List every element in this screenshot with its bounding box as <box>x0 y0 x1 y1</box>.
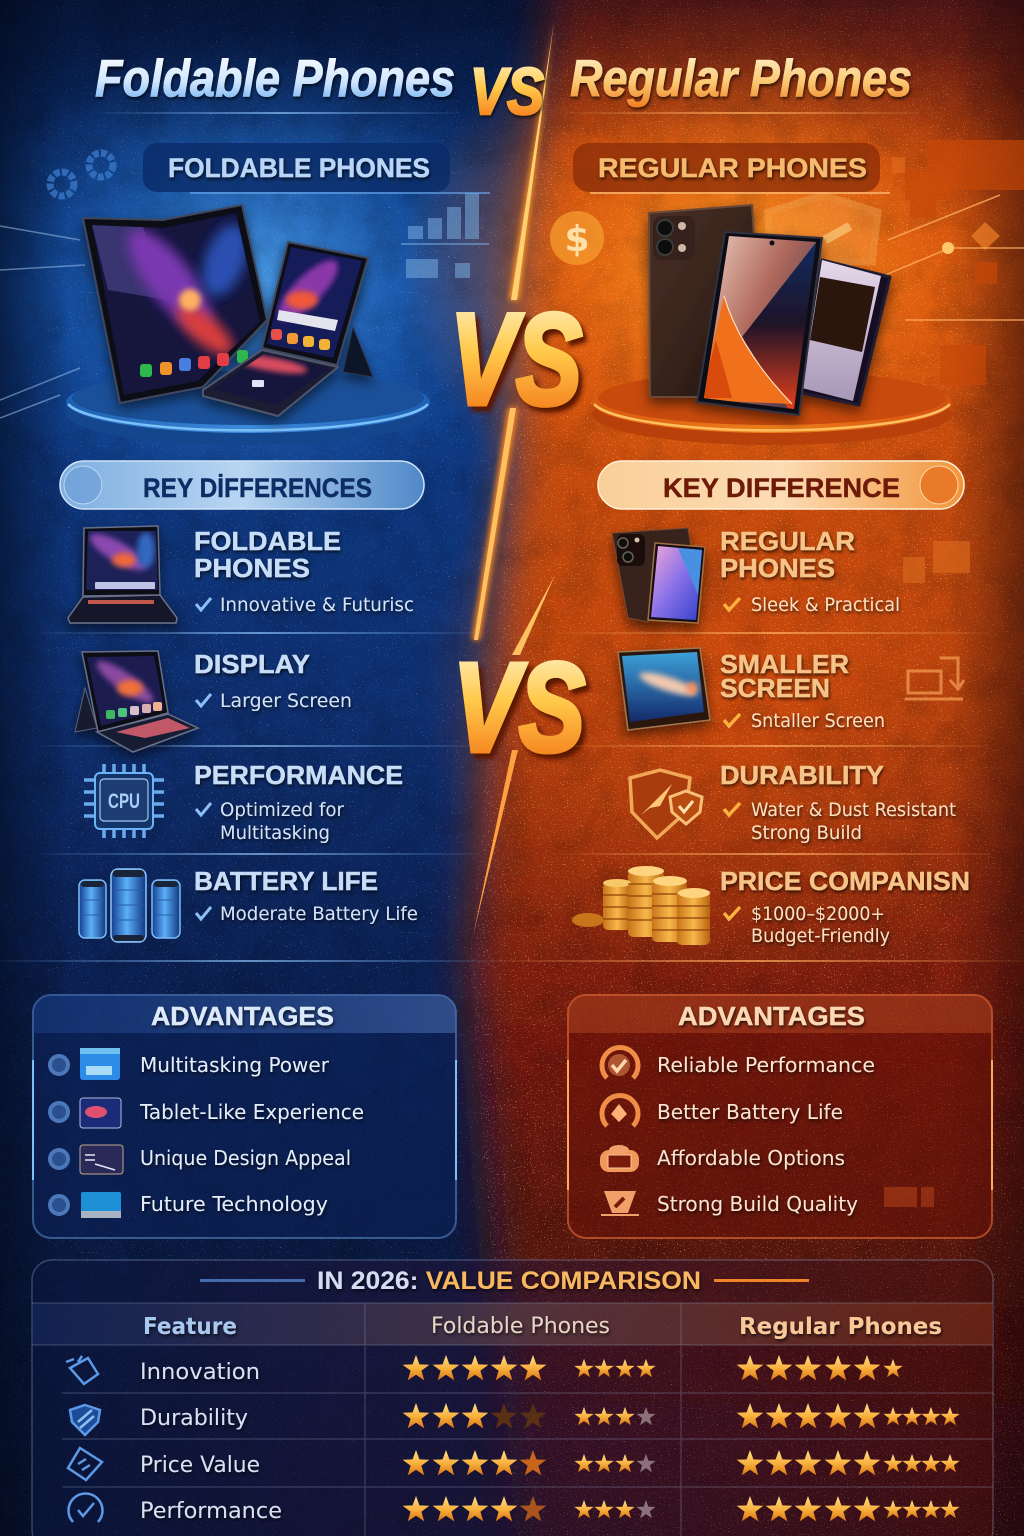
icon: coin stacks <box>572 866 710 945</box>
stars: price value foldable <box>403 1450 656 1475</box>
label: BATTERY LIFE <box>194 866 378 896</box>
heading rules <box>200 1279 809 1282</box>
left row: foldable phones <box>68 526 414 623</box>
platform: left <box>66 371 430 445</box>
title: foldable phones: Foldable Phones <box>95 50 455 108</box>
value: Strong Build <box>751 822 862 844</box>
icon: performance <box>68 1493 102 1522</box>
icon: durability <box>70 1405 100 1435</box>
section pill: regular phones: REGULAR PHONES <box>598 153 867 183</box>
decor screens <box>905 658 964 699</box>
item: affordable options: Affordable Options <box>657 1146 845 1170</box>
label: durability: Durability <box>140 1406 248 1431</box>
item: unique design appeal <box>50 1145 351 1174</box>
vs badge: upper: VS <box>450 286 582 432</box>
panel: value comparison table <box>32 1260 993 1536</box>
stars: performance regular <box>737 1496 960 1521</box>
icon: small foldable laptop-like phone <box>68 526 177 623</box>
value: Sntaller Screen <box>751 710 885 732</box>
check <box>196 803 211 815</box>
label: PRICE COMPANISN <box>720 866 970 896</box>
title: vs: VS <box>470 54 544 128</box>
value: Water & Dust Resistant <box>751 799 956 821</box>
stars: innovation foldable <box>403 1355 656 1380</box>
key differences pill: right <box>598 461 964 509</box>
icon: innovation <box>66 1356 98 1384</box>
label: PHONES <box>720 553 835 583</box>
column header: foldable phones: Foldable Phones <box>431 1314 610 1339</box>
label: DURABILITY <box>720 760 884 790</box>
foldable phones illustration <box>80 200 373 416</box>
check <box>196 694 211 706</box>
heading: ADVANTAGES <box>151 1001 334 1031</box>
decor: right coin, shield and blocks <box>550 140 1024 385</box>
lightning divider <box>472 22 555 936</box>
label: DISPLAY <box>194 649 310 679</box>
panel: advantages left <box>33 995 456 1238</box>
label: SMALLER <box>720 649 849 679</box>
stars: durability foldable <box>403 1403 656 1428</box>
label: SCREEN <box>720 673 830 703</box>
icon: shield with check <box>630 770 702 838</box>
key differences pill: left <box>60 461 424 509</box>
icon: open foldable on stand <box>75 650 198 752</box>
label: innovation: Innovation <box>140 1360 260 1385</box>
value: $1000–$2000+ <box>751 903 885 925</box>
item: unique design appeal: Unique Design Appeal <box>140 1146 351 1170</box>
stars: durability regular <box>737 1403 960 1428</box>
value: Sleek & Practical <box>751 594 900 616</box>
value: Budget-Friendly <box>751 925 890 947</box>
title underlines <box>100 112 920 114</box>
icon: two phones <box>612 528 705 623</box>
label: FOLDABLE <box>194 526 341 556</box>
item: multitasking power <box>50 1048 330 1080</box>
item: strong build quality: Strong Build Quality <box>657 1192 858 1216</box>
item: multitasking power: Multitasking Power <box>140 1053 330 1077</box>
decor: left gears and chart <box>0 153 489 418</box>
column header: feature: Feature <box>143 1314 237 1340</box>
item: better battery life: Better Battery Life <box>657 1100 843 1124</box>
left row: performance <box>84 760 403 844</box>
icon: large foldable phone <box>80 200 280 410</box>
vs badge: lower: VS <box>453 637 585 778</box>
icon: flip phone <box>203 240 373 416</box>
value: Multitasking <box>220 822 330 844</box>
item: affordable options <box>600 1145 845 1172</box>
section pill: foldable phones: FOLDABLE PHONES <box>168 153 430 183</box>
icon: lavender phone <box>802 260 890 405</box>
check <box>724 714 740 726</box>
left row: battery life <box>79 866 418 942</box>
item: reliable performance: Reliable Performance <box>657 1053 875 1077</box>
item: tablet-like experience: Tablet-Like Experience <box>139 1100 364 1124</box>
panel: advantages right <box>568 995 992 1238</box>
decor: right coin, shield and blocks: $ <box>564 219 590 260</box>
key differences pill: left: REY DİFFERENCES <box>143 473 372 503</box>
regular phones illustration <box>649 205 890 415</box>
decor blocks <box>903 541 970 583</box>
label: PHONES <box>194 553 310 583</box>
check <box>724 598 740 610</box>
icon: front phone <box>697 230 825 415</box>
title <box>95 50 912 128</box>
item: better battery life <box>602 1096 843 1126</box>
stars: performance foldable <box>403 1496 656 1521</box>
check <box>196 598 211 610</box>
value: Moderate Battery Life <box>220 903 418 925</box>
item: tablet-like experience <box>50 1098 364 1128</box>
title: regular phones: Regular Phones <box>570 50 912 108</box>
heading: ADVANTAGES <box>678 1001 865 1031</box>
stars: innovation regular <box>737 1355 903 1380</box>
value: Optimized for <box>220 799 344 821</box>
label: price value: Price Value <box>140 1453 260 1478</box>
left row: display <box>75 649 352 752</box>
icon: price value <box>68 1448 102 1480</box>
key differences pill: right: KEY DIFFERENCE <box>663 473 900 503</box>
right row: regular phones <box>612 526 970 623</box>
row separators <box>0 632 1024 962</box>
label: performance: Performance <box>140 1499 282 1524</box>
section pill: foldable phones <box>143 143 490 194</box>
right row: durability <box>630 760 956 844</box>
column header: regular phones: Regular Phones <box>739 1314 942 1340</box>
value: Innovative & Futurisc <box>220 594 414 616</box>
table heading: IN 2026: VALUE COMPARISON <box>317 1267 701 1295</box>
icon: small tablet <box>618 648 710 730</box>
decor blocks <box>884 1187 934 1207</box>
stars: price value regular <box>737 1450 960 1475</box>
check <box>724 907 740 919</box>
icon: cpu chip <box>84 764 164 838</box>
right row: smaller screen <box>618 648 964 732</box>
item: reliable performance <box>602 1048 875 1078</box>
check <box>724 803 740 815</box>
label: REGULAR <box>720 526 855 556</box>
check <box>196 907 211 919</box>
icon: cpu chip: CPU <box>108 790 140 813</box>
label: PERFORMANCE <box>194 760 403 790</box>
icon: batteries <box>79 869 180 942</box>
table lines <box>32 1303 993 1536</box>
item: future technology: Future Technology <box>140 1192 328 1216</box>
platform: right <box>592 371 952 445</box>
right row: price <box>572 866 970 947</box>
icon: dark phone back <box>649 205 758 397</box>
value: Larger Screen <box>220 690 352 712</box>
section pill: regular phones <box>573 143 890 194</box>
item: future technology <box>50 1192 328 1218</box>
